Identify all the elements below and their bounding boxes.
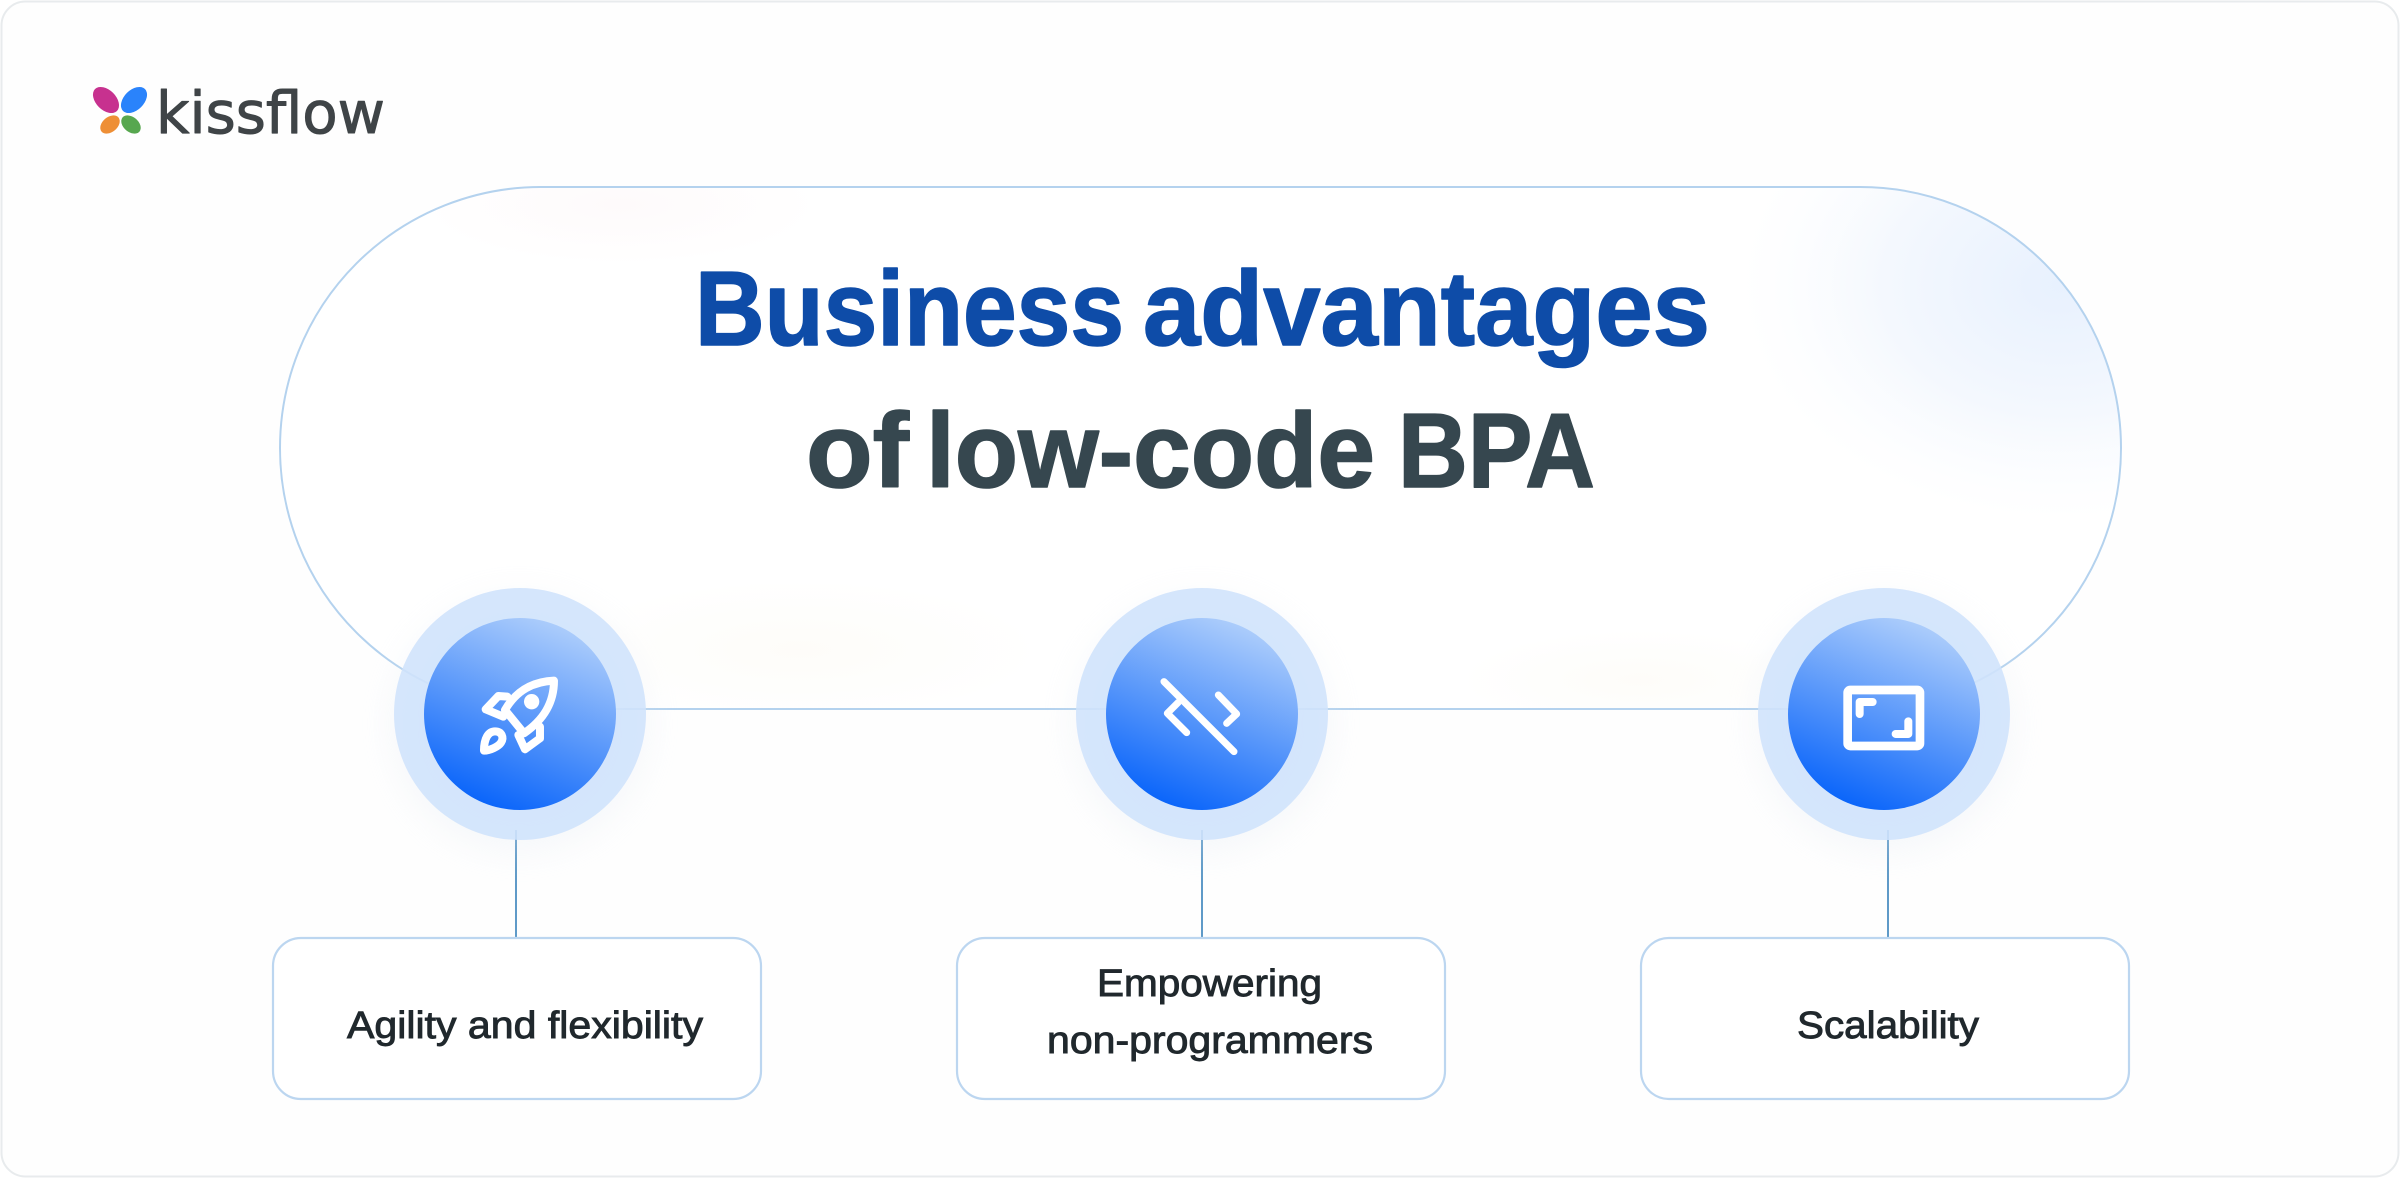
title [695,250,1710,510]
title line 1 [695,250,1710,368]
title line 2: of [806,392,910,510]
node: scalability [1758,588,2010,850]
card: scalability [1641,938,2129,1099]
title line 1: Business [695,250,1124,368]
connector: empowering stem [1201,830,1203,938]
node: empowering [1076,588,1328,850]
icon: rocket [484,681,554,751]
panel: title pill [279,186,2122,710]
title line 1: advantages [1143,250,1710,368]
card: empowering non-programmers: non-programmers [1047,1020,1373,1062]
icon: resize frame [1848,690,1920,746]
connector: scalability stem [1887,830,1889,938]
card: empowering non-programmers: Empowering [1097,963,1322,1005]
logo: kissflow [88,79,385,147]
card: scalability: Scalability [1797,1005,1979,1047]
node: agility [394,588,646,850]
title line 2: low-code [926,392,1375,510]
connector: agility stem [515,830,517,938]
icon: butterfly petals [88,82,152,137]
title line 2: BPA [1398,392,1595,510]
card: agility and flexibility: Agility and flexibility [347,1005,703,1047]
card: agility and flexibility [273,938,761,1099]
icon: code off [1164,682,1237,752]
title line 2 [806,392,1595,510]
logo wordmark: kissflow [156,79,385,147]
card: empowering non-programmers [957,938,1445,1099]
